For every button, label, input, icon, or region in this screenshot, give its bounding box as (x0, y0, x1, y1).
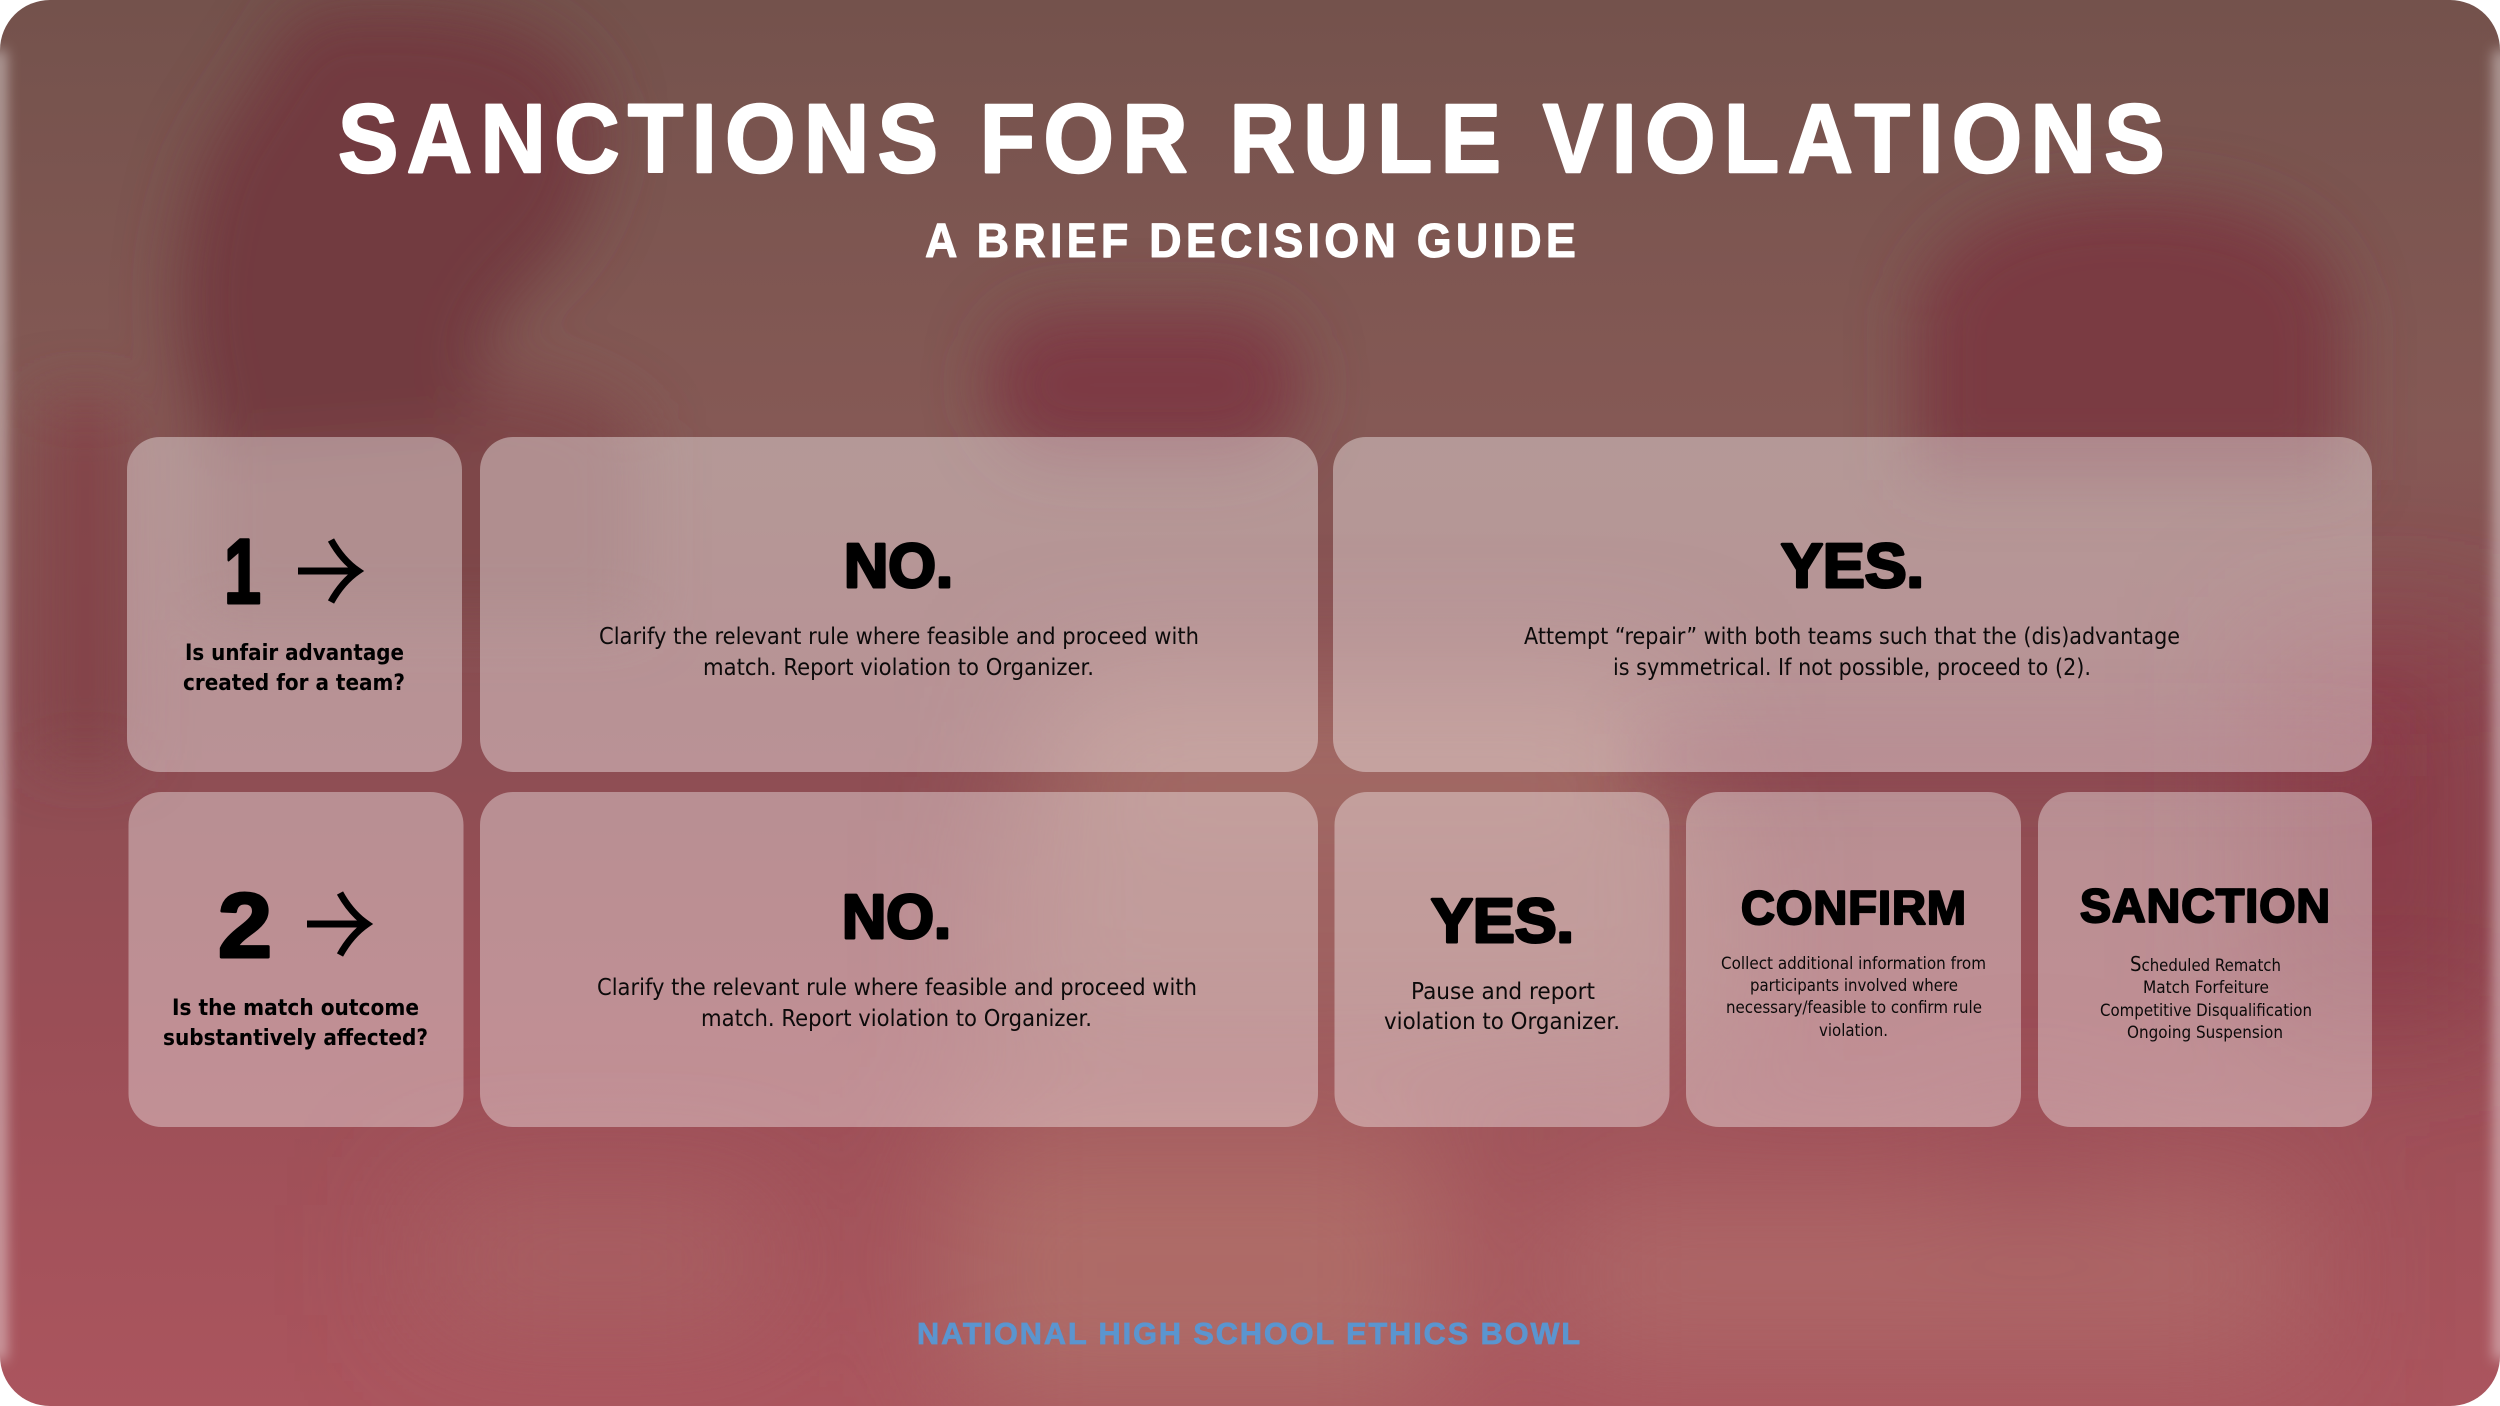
question text (183, 640, 405, 696)
body text: Collect additional information from (1721, 954, 1986, 973)
body text: Attempt “repair” with both teams such that the (dis)advantage (1524, 624, 2180, 650)
panel: question 1 (127, 437, 462, 772)
body text: participants involved where (1750, 976, 1958, 995)
panel: question 2 (128, 792, 464, 1127)
body text: Clarify the relevant rule where feasible and proceed with (597, 975, 1197, 1001)
heading: confirm: CONFIRM (1741, 881, 1967, 934)
subtitle: A BRIEF DECISION GUIDE (925, 215, 1580, 268)
question text (163, 995, 428, 1051)
panel: answer yes, row 1 (1333, 437, 2372, 772)
question text: Is the match outcome (172, 995, 419, 1021)
panel: confirm (1686, 792, 2021, 1127)
body text (599, 624, 1199, 681)
heading: yes: YES. (1781, 532, 1924, 601)
body text: match. Report violation to Organizer. (701, 1006, 1092, 1032)
title: SANCTIONS FOR RULE VIOLATIONS (338, 84, 2173, 193)
body text: is symmetrical. If not possible, proceed to (2). (1613, 655, 2091, 681)
heading: no: NO. (844, 532, 953, 601)
body text (1721, 954, 1986, 1040)
body text: necessary/feasible to confirm rule (1726, 998, 1982, 1017)
list of sanctions: Competitive Disqualification (2100, 1001, 2312, 1020)
body text: violation to Organizer. (1384, 1009, 1620, 1035)
question text: created for a team? (183, 670, 405, 696)
heading: yes: YES. (1431, 887, 1574, 956)
body text: violation. (1819, 1021, 1888, 1040)
list of sanctions: Ongoing Suspension (2127, 1023, 2283, 1042)
body text (1524, 624, 2180, 681)
question text: substantively affected? (163, 1025, 428, 1051)
list of sanctions: Scheduled Rematch (2130, 952, 2281, 976)
panel: answer yes, row 2 (1334, 792, 1670, 1127)
body text: match. Report violation to Organizer. (703, 655, 1094, 681)
list of sanctions: Match Forfeiture (2143, 978, 2269, 997)
heading: no: NO. (842, 883, 951, 952)
number 2: 2 (218, 875, 272, 977)
panel: sanction (2038, 792, 2372, 1127)
panel: answer no, row 2 (480, 792, 1318, 1127)
body text: Clarify the relevant rule where feasible and proceed with (599, 624, 1199, 650)
footer: organization name: NATIONAL HIGH SCHOOL ETHICS BOWL (917, 1316, 1582, 1351)
body text (1384, 979, 1620, 1035)
icon: arrow (307, 893, 367, 955)
body text: Pause and report (1411, 979, 1595, 1005)
list of sanctions (2100, 952, 2312, 1042)
heading: sanction: SANCTION (2080, 879, 2331, 932)
panel: answer no, row 1 (480, 437, 1318, 772)
number 1: 1 (224, 521, 261, 623)
icon: arrow (298, 540, 358, 602)
body text (597, 975, 1197, 1032)
question text: Is unfair advantage (185, 640, 404, 666)
